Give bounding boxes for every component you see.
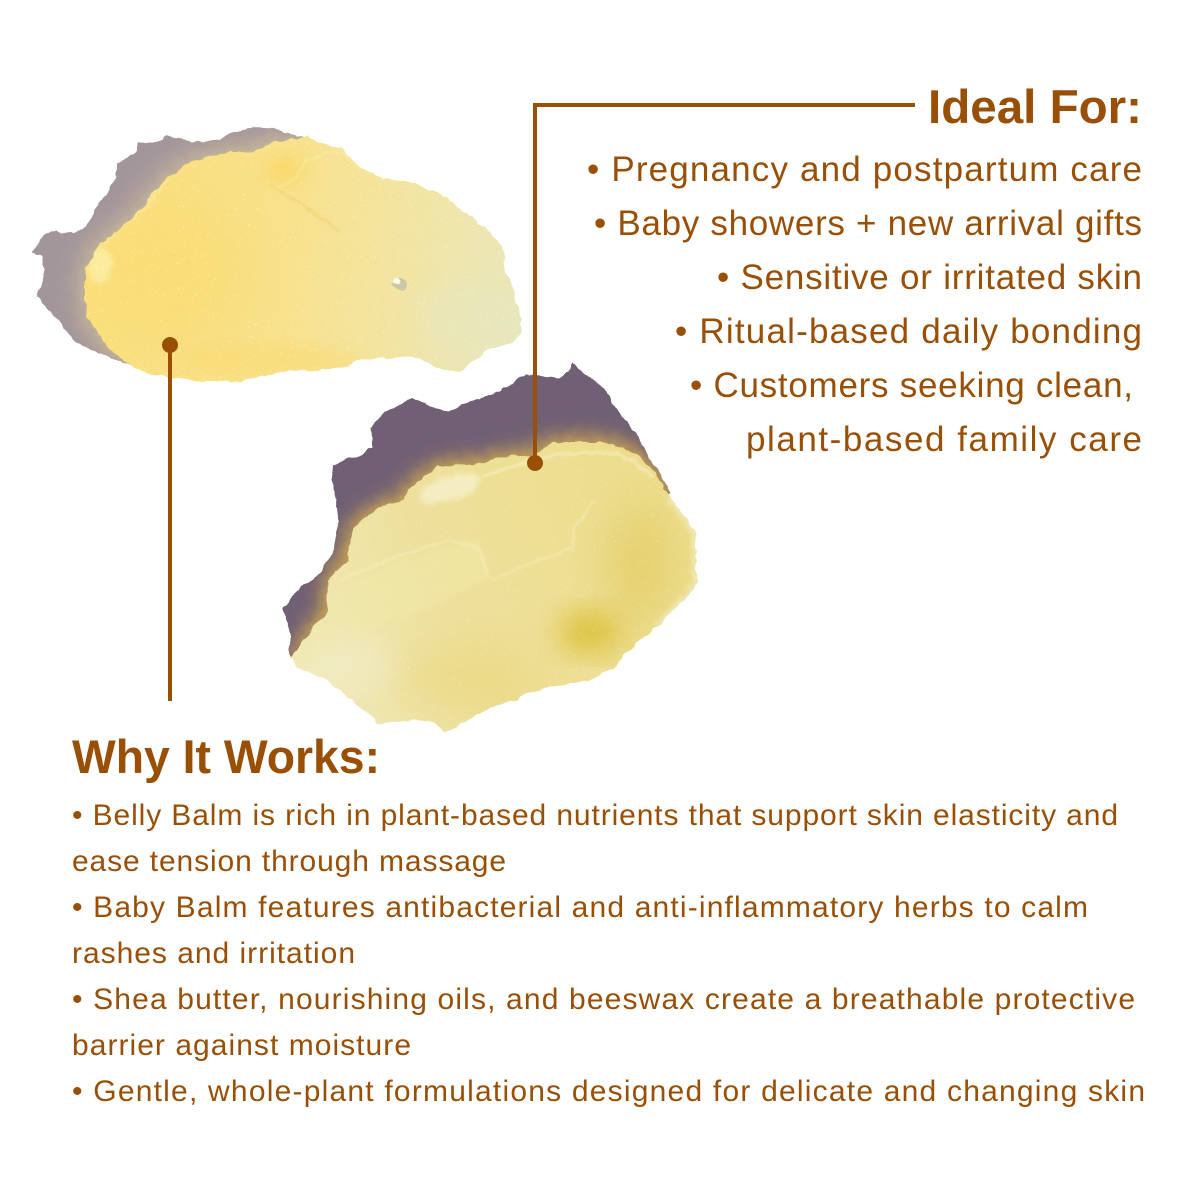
text block: why it works: barrier against moisture (72, 1029, 411, 1062)
connector: why it works (162, 337, 178, 701)
text block: why it works: • Belly Balm is rich in plant-based nutrients that support skin elasticity and (72, 799, 1118, 832)
heading: ideal for: Ideal For: (928, 80, 1142, 133)
list: ideal for: plant-based family care (746, 420, 1142, 459)
text block: why it works: • Shea butter, nourishing oils, and beeswax create a breathable protective (72, 983, 1135, 1016)
list: ideal for: • Pregnancy and postpartum care (587, 150, 1142, 189)
text block: why it works: • Gentle, whole-plant formulations designed for delicate and changing skin (72, 1075, 1145, 1108)
text block: why it works: rashes and irritation (72, 937, 355, 970)
balm swatch: lower smear (270, 355, 705, 740)
list: ideal for: • Sensitive or irritated skin (717, 258, 1142, 297)
list: ideal for: • Baby showers + new arrival gifts (594, 204, 1142, 243)
list: ideal for (587, 150, 1142, 459)
list: ideal for: • Customers seeking clean, (690, 366, 1133, 405)
list: ideal for: • Ritual-based daily bonding (675, 312, 1142, 351)
heading: why it works: Why It Works: (72, 730, 380, 783)
connector: ideal for (527, 105, 915, 471)
text block: why it works: ease tension through massage (72, 845, 506, 878)
balm swatch: upper smear (32, 126, 522, 382)
text block: why it works: • Baby Balm features antibacterial and anti-inflammatory herbs to calm (72, 891, 1088, 924)
text block: why it works (72, 799, 1145, 1108)
